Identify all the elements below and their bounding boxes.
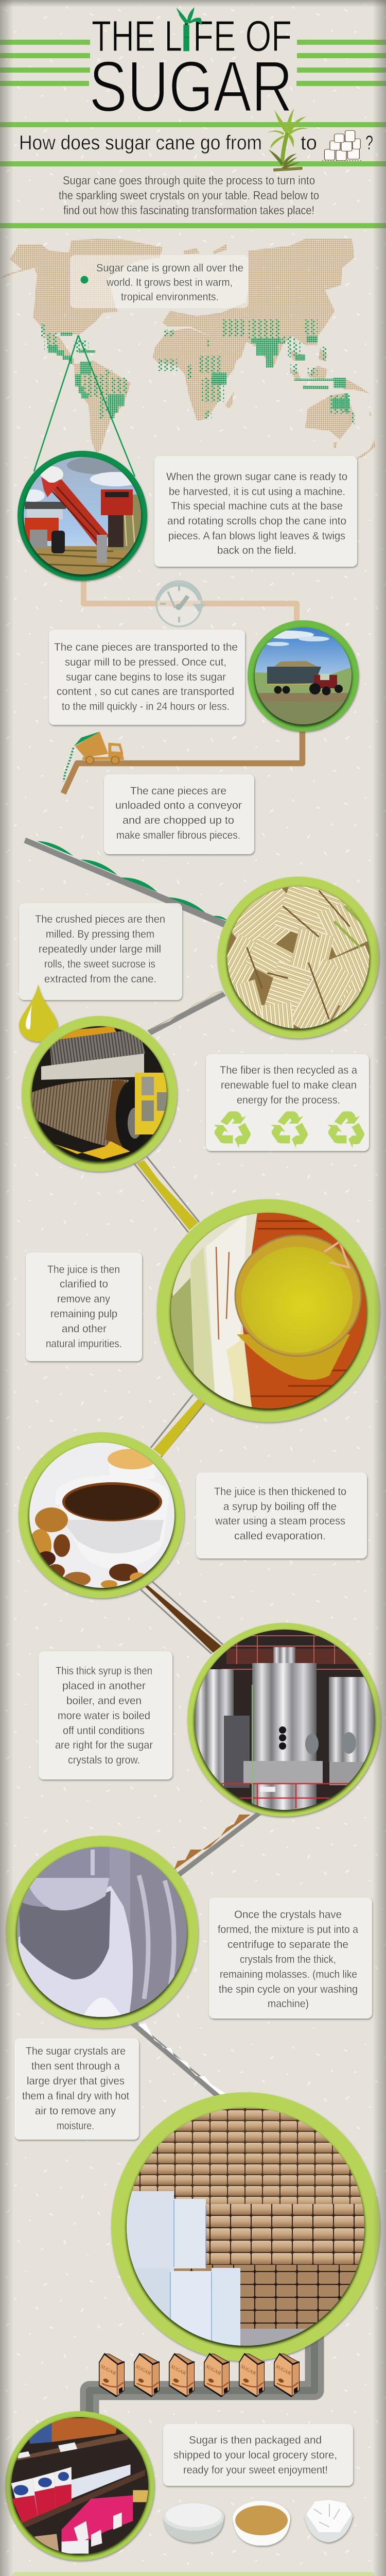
icon: row of sugar bags [99, 2353, 300, 2397]
world map [0, 239, 375, 477]
photo circle: tractor and trailer [248, 620, 359, 732]
panel: centrifuge: crystals from the thick, [240, 1954, 336, 1965]
panel: packaging and shipping [163, 2424, 353, 2486]
title: the life of sugar [89, 12, 293, 127]
panel: packaging and shipping: shipped to your local grocery store, [173, 2449, 337, 2461]
edge vignette, lower section [0, 2568, 386, 2576]
connector path: harvest to transport [83, 577, 296, 623]
title: the life of sugar: FE OF [193, 12, 292, 60]
panel: harvesting: pieces. A fan blows light leaves & twigs [168, 530, 345, 542]
panel: transport [49, 630, 245, 725]
panel: did you know [12, 2572, 375, 2576]
panel: crystal growth: crystals to grow. [68, 1754, 140, 1766]
icon: sugar cane plant [267, 108, 308, 171]
panel: milling: rolls, the sweet sucrose is [44, 958, 155, 970]
panel: centrifuge [209, 1897, 372, 2019]
panel: clarifying: The juice is then [47, 1264, 120, 1276]
panel: clarifying: natural impurities. [46, 1338, 122, 1350]
panel: crystal growth: placed in another [62, 1680, 146, 1692]
panel: fiber recycling [206, 1054, 369, 1151]
panel: fiber recycling: energy for the process. [237, 1094, 340, 1106]
panel: crystal growth: boiler, and even [66, 1695, 142, 1707]
panel: milling: extracted from the cane. [44, 973, 156, 985]
panel: transport: to the mill quickly - in 24 hours or less. [62, 701, 230, 713]
icon: row of sugar bags: SUGAR [240, 2364, 257, 2377]
photo circle: syrup cup [19, 1432, 184, 1598]
panel: unloading and chopping: The cane pieces are [130, 785, 226, 797]
panel: drying: then sent through a [31, 2060, 120, 2072]
panel: evaporation: water using a steam process [215, 1515, 345, 1527]
photo circle: cane juice [156, 1199, 380, 1422]
panel: harvesting: When the grown sugar cane is ready to [166, 471, 347, 483]
panel: fiber recycling: The fiber is then recycled as a [220, 1064, 357, 1076]
panel: centrifuge: remaining molasses. (much like [220, 1969, 357, 1980]
section: did you know and footer [0, 2568, 386, 2576]
panel: crystal growth: This thick syrup is then [56, 1665, 152, 1677]
panel: drying: The sugar crystals are [26, 2045, 126, 2057]
photo circle: sugar sacks [111, 2092, 380, 2361]
panel: milling: repeatedly under large mill [39, 943, 161, 955]
syrup pipe [141, 1582, 223, 1654]
panel: crystal growth: are right for the sugar [55, 1739, 153, 1751]
panel: centrifuge: machine) [268, 1998, 309, 2010]
icon: cane replacing the letter i [176, 7, 202, 51]
intro text: find out how this fascinating transformation takes place! [63, 204, 314, 217]
panel: drying: large dryer that gives [27, 2075, 125, 2087]
title: the life of sugar: SUGAR [89, 46, 293, 127]
panel: harvesting: be harvested, it is cut using a machine. [169, 486, 345, 498]
panel: centrifuge: the spin cycle on your washing [219, 1984, 358, 1995]
icon: recycle symbols [214, 1111, 364, 1148]
icon: juice drop [19, 984, 58, 1042]
title: the life of sugar: THE L [92, 12, 182, 60]
photo circle: cane fibers [217, 877, 380, 1041]
panel: drying: air to remove any [35, 2105, 116, 2117]
panel: evaporation: The juice is then thickened to [214, 1486, 346, 1498]
packaging line path [90, 2318, 314, 2432]
intro text: Sugar cane goes through quite the process to turn into [63, 174, 315, 187]
icon: bowl of sugar cubes [304, 2500, 353, 2543]
panel: where sugar cane grows: world. It grows best in warm, [106, 277, 233, 289]
panel: where sugar cane grows: tropical environments. [121, 291, 219, 303]
header stripes [0, 40, 386, 228]
panel: clarifying: remaining pulp [50, 1308, 117, 1320]
panel: packaging and shipping: ready for your sweet enjoyment! [183, 2464, 328, 2476]
panel: transport: sugar cane begins to lose its sugar [66, 671, 226, 683]
panel: clarifying: remove any [57, 1293, 110, 1305]
panel: harvesting [154, 456, 357, 567]
panel: drying: them a final dry with hot [22, 2090, 129, 2102]
subtitle question: How does sugar cane go from [19, 132, 262, 154]
panel: transport: The cane pieces are transported to the [54, 641, 238, 653]
panel: harvesting: This special machine cuts at the base [171, 500, 343, 512]
panel: packaging and shipping: Sugar is then packaged and [189, 2434, 322, 2446]
panel: evaporation [196, 1472, 367, 1558]
panel: clarifying: clarified to [60, 1278, 108, 1290]
conveyor with chopped cane [24, 838, 227, 928]
subtitle question: ? [365, 132, 373, 154]
icon: sugar cube pile [323, 130, 362, 161]
panel: transport: content , so cut canes are transported [57, 686, 234, 698]
panel: crystal growth: off until conditions [63, 1725, 145, 1737]
photo circle: grocery shelves [5, 2411, 154, 2561]
panel: unloading and chopping: and are chopped up to [122, 815, 234, 826]
panel: crystal growth [39, 1651, 172, 1780]
panel: evaporation: called evaporation. [234, 1530, 326, 1542]
photo circle: boilers [187, 1623, 381, 1817]
icon: row of sugar bags: SUGAR [275, 2364, 292, 2377]
panel: clarifying [26, 1252, 142, 1361]
photo circle: mill rollers [22, 1016, 177, 1172]
panel: milling [19, 903, 182, 1000]
panel: unloading and chopping [104, 774, 254, 854]
title: the life of sugar: I [181, 12, 191, 60]
icon: bowl of white sugar [163, 2503, 224, 2543]
panel: drying: moisture. [57, 2120, 94, 2132]
panel: evaporation: a syrup by boiling off the [223, 1501, 337, 1513]
intro text [59, 174, 319, 217]
panel: milling: The crushed pieces are then [35, 913, 165, 925]
panel: crystal growth: more water is boiled [58, 1710, 150, 1722]
subtitle question: to [301, 132, 317, 154]
photo circle: harvester [17, 451, 147, 581]
conveyor with brown crystals [174, 1812, 261, 1878]
connector path: transport to unloading [63, 729, 303, 793]
panel: where sugar cane grows [70, 255, 249, 308]
intro text: the sparkling sweet crystals on your table. Read below to [59, 189, 319, 202]
lower page background [0, 2568, 386, 2576]
panel: centrifuge: Once the crystals have [234, 1909, 342, 1921]
juice pipe 2 [151, 1395, 205, 1457]
panel: centrifuge: formed, the mixture is put into a [218, 1924, 358, 1936]
icon: row of sugar bags: SUGAR [135, 2364, 152, 2377]
icon: bowl of brown sugar [233, 2501, 290, 2546]
panel: harvesting: back on the field. [217, 545, 296, 556]
panel: transport: sugar mill to be pressed. Once cut, [65, 656, 226, 668]
panel: clarifying: and other [62, 1323, 107, 1335]
panel: unloading and chopping: make smaller fibrous pieces. [116, 829, 240, 841]
panel: harvesting: and rotating scrolls chop the cane into [167, 515, 346, 527]
conveyor with white crystals [130, 2022, 226, 2098]
panel: where sugar cane grows: Sugar cane is grown all over the [96, 262, 243, 274]
panel: drying [14, 2038, 139, 2140]
panel: fiber recycling: renewable fuel to make clean [221, 1079, 357, 1091]
icon: row of sugar bags: SUGAR [100, 2364, 117, 2377]
icon: row of sugar bags: SUGAR [170, 2364, 187, 2377]
panel: milling: milled. By pressing them [46, 928, 154, 940]
icon: dump truck [63, 732, 124, 782]
juice pipe 1 [134, 1157, 199, 1232]
icon: clock [156, 581, 206, 626]
photo circle: centrifuge [6, 1836, 198, 2028]
conveyor to rollers [147, 991, 226, 1035]
icon: row of sugar bags: SUGAR [205, 2364, 222, 2377]
panel: centrifuge: centrifuge to separate the [227, 1939, 348, 1951]
icon: green dot legend [80, 276, 89, 283]
panel: unloading and chopping: unloaded onto a conveyor [115, 800, 242, 811]
